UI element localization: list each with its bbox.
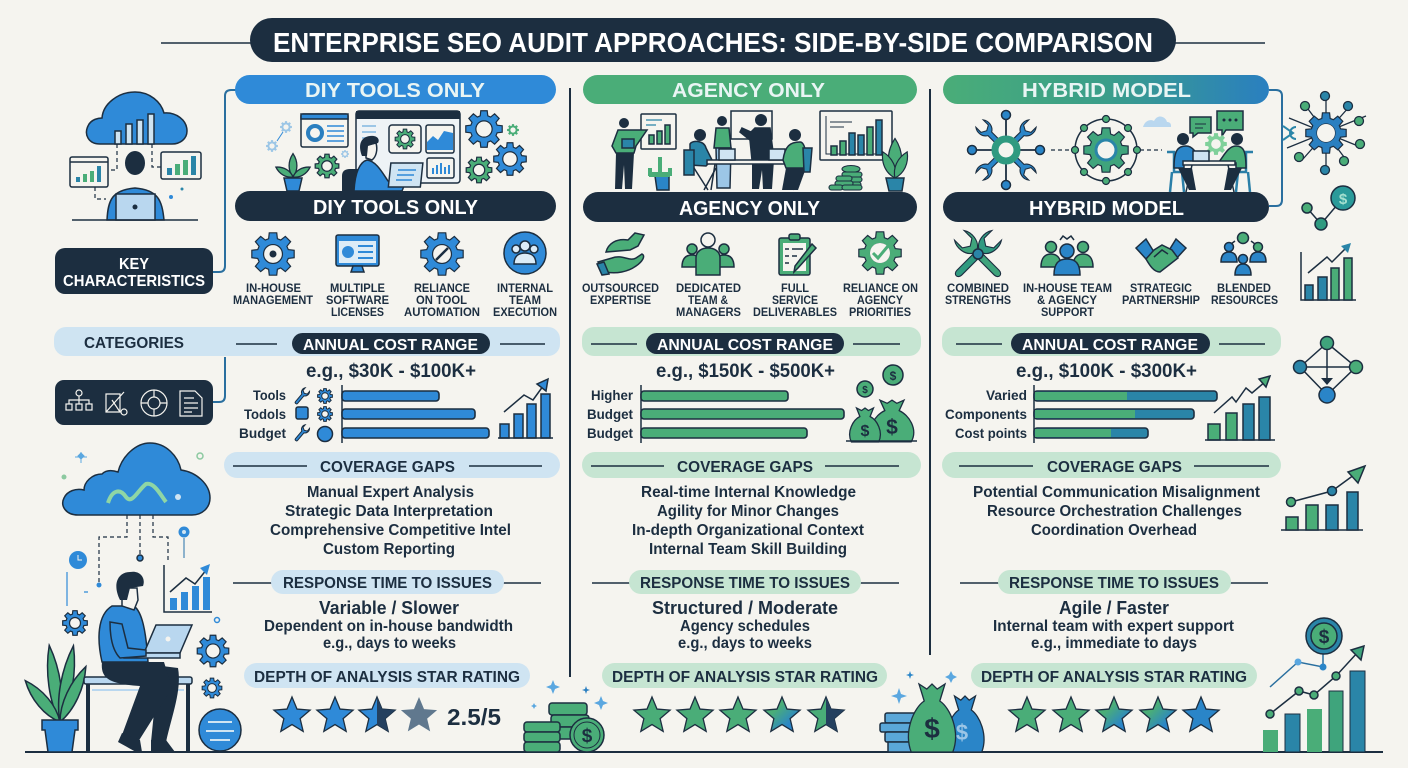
text: hybrid cost range: e.g., $100K - $300K+: [1016, 361, 1197, 382]
text: DIY characteristic labels: AUTOMATION: [404, 305, 480, 319]
chart: bottom right growth with coin: $: [1319, 627, 1330, 648]
text: agency response detail: [652, 598, 838, 652]
text: hybrid characteristic labels: PARTNERSHIP: [1122, 293, 1200, 307]
heading: DIY tools only subheader: DIY TOOLS ONLY: [313, 196, 478, 219]
heading: DIY depth of analysis: DEPTH OF ANALYSIS STAR RATING: [254, 669, 520, 686]
icon: reliance on agency priorities gear: [859, 232, 901, 274]
chart: hybrid coverage trend: [1281, 466, 1365, 530]
connector: hybrid headers to network gear: [1269, 90, 1296, 206]
heading: hybrid response time: [960, 570, 1268, 594]
text: DIY coverage gaps list: Strategic Data Interpretation: [285, 503, 493, 520]
text: hybrid response detail: [993, 598, 1234, 652]
illustration: books and money bags: $: [956, 720, 968, 745]
text: agency characteristic labels: DELIVERABLES: [753, 305, 837, 319]
heading: DIY coverage gaps: COVERAGE GAPS: [320, 459, 455, 476]
heading: agency coverage gaps: [582, 452, 921, 478]
text: hybrid characteristic labels: [945, 281, 1278, 319]
text: agency characteristic labels: PRIORITIES: [849, 305, 911, 319]
heading: DIY response time: [233, 570, 541, 594]
chart: DIY cost bars: [239, 385, 489, 443]
icon: strategic partnership handshake: [1136, 239, 1186, 272]
chart: hybrid cost bars: Components: [945, 406, 1027, 422]
heading: agency annual cost range: [582, 327, 921, 356]
icon: full service deliverables clipboard: [779, 234, 816, 275]
heading: hybrid annual cost range: [942, 327, 1281, 356]
text: agency characteristic labels: TEAM &: [688, 293, 728, 307]
text: hybrid characteristic labels: IN-HOUSE TEAM: [1023, 281, 1112, 295]
icon: outsourced expertise hand: [597, 233, 644, 275]
text: DIY cost range: e.g., $30K - $100K+: [306, 361, 476, 382]
icon: combined strengths wrenches: [950, 229, 1006, 282]
heading: hybrid annual cost range: ANNUAL COST RANGE: [1022, 337, 1198, 354]
text: agency coverage gaps list: Internal Team Skill Building: [649, 541, 847, 558]
icon: agency money bags: [846, 365, 917, 442]
heading: DIY tools only subheader: [235, 191, 556, 221]
panel: categories band: ANNUAL COST RANGE: [303, 337, 478, 354]
text: agency coverage gaps list: [632, 484, 864, 558]
heading: hybrid model subheader: HYBRID MODEL: [1029, 197, 1184, 220]
text: DIY coverage gaps list: Manual Expert Analysis: [307, 484, 474, 501]
text: DIY characteristic labels: TEAM: [509, 293, 541, 307]
text: DIY characteristic labels: EXECUTION: [493, 305, 557, 319]
text: DIY characteristic labels: RELIANCE: [414, 281, 470, 295]
text: DIY characteristic labels: MULTIPLE: [330, 281, 385, 295]
chart: bottom right growth with coin: [1263, 618, 1365, 752]
chart: DIY cost bars: Tools: [253, 387, 286, 403]
rating: hybrid stars: [1009, 697, 1219, 731]
icon: in-house team and agency support: [1041, 236, 1093, 275]
ground line: [25, 751, 1383, 753]
text: agency characteristic labels: EXPERTISE: [590, 293, 651, 307]
title banner: [161, 18, 1265, 62]
text: hybrid characteristic labels: STRENGTHS: [945, 293, 1011, 307]
text: agency cost range: e.g., $150K - $500K+: [656, 361, 835, 382]
heading: hybrid model header: [943, 75, 1269, 104]
text: hybrid characteristic labels: & AGENCY: [1037, 293, 1097, 307]
heading: DIY coverage gaps: [224, 452, 560, 478]
text: DIY response detail: Dependent on in-house bandwidth: [264, 618, 513, 635]
title banner: ENTERPRISE SEO AUDIT APPROACHES: SIDE-BY-SIDE COMPARISON: [273, 27, 1153, 58]
illustration: analyst under cloud with charts: [70, 92, 201, 220]
panel: agency only: [582, 75, 918, 319]
chart: hybrid growth icon: [1205, 376, 1275, 440]
chart: hybrid cost bars: Varied: [986, 387, 1027, 403]
text: agency characteristic labels: FULL: [781, 281, 809, 295]
text: DIY response detail: Variable / Slower: [319, 598, 459, 618]
rating: DIY stars 2.5 of 5: [274, 697, 501, 731]
heading: hybrid depth of analysis: DEPTH OF ANALYSIS STAR RATING: [981, 669, 1247, 686]
icon: multiple software licenses monitor: [336, 235, 379, 272]
icon: dollar node: $: [1339, 191, 1348, 208]
column dividers: [570, 88, 930, 677]
heading: hybrid coverage gaps: COVERAGE GAPS: [1047, 459, 1182, 476]
heading: DIY response time: RESPONSE TIME TO ISSUES: [283, 575, 492, 592]
text: DIY coverage gaps list: Comprehensive Competitive Intel: [270, 522, 511, 539]
text: agency characteristic labels: MANAGERS: [676, 305, 741, 319]
chart: side growth chart: [1301, 243, 1356, 300]
text: DIY coverage gaps list: [270, 484, 511, 558]
heading: agency response time: RESPONSE TIME TO ISSUES: [640, 575, 850, 592]
panel: categories band: CATEGORIES: [84, 335, 184, 352]
text: DIY response detail: [264, 598, 513, 652]
text: hybrid response detail: Agile / Faster: [1059, 598, 1169, 618]
icon: dedicated team managers: [682, 233, 734, 275]
text: hybrid coverage gaps list: Potential Communication Misalignment: [973, 484, 1260, 501]
text: DIY characteristic labels: LICENSES: [331, 305, 384, 319]
icon: dollar node: [1302, 186, 1355, 230]
illustration: agency team meeting: [612, 111, 912, 191]
icon: agency money bags: $: [861, 423, 870, 440]
illustration: books and money bags: [880, 671, 984, 752]
text: agency characteristic labels: RELIANCE ON: [843, 281, 918, 295]
text: DIY characteristic labels: ON TOOL: [416, 293, 467, 307]
illustration: books and money bags: $: [924, 713, 940, 744]
text: DIY characteristic labels: [233, 281, 557, 319]
chart: agency cost bars: Higher: [591, 387, 634, 403]
heading: DIY tools only header: DIY TOOLS ONLY: [305, 79, 485, 102]
chart: agency cost bars: Budget: [587, 425, 633, 441]
text: DIY characteristic labels: INTERNAL: [497, 281, 553, 295]
chart: agency cost bars: [587, 385, 844, 443]
illustration: person with laptop under cloud: [21, 443, 241, 752]
text: hybrid response detail: Internal team with expert support: [993, 618, 1234, 635]
icon: network gear: [1287, 92, 1366, 174]
text: agency characteristic labels: OUTSOURCED: [582, 281, 659, 295]
heading: DIY depth of analysis: [244, 663, 530, 688]
illustration: person at dashboard with gears: [266, 111, 526, 191]
chart: DIY growth icon: [498, 379, 553, 438]
chart: DIY cost bars: Budget: [239, 425, 286, 441]
icon: in-house management gear: [252, 233, 294, 275]
text: DIY characteristic labels: SOFTWARE: [326, 293, 389, 307]
heading: hybrid model subheader: [943, 192, 1269, 222]
text: DIY characteristic labels: MANAGEMENT: [233, 293, 314, 307]
heading: agency only header: [583, 75, 917, 104]
heading: agency annual cost range: ANNUAL COST RANGE: [657, 337, 833, 354]
heading: agency only subheader: [583, 192, 917, 222]
panel: key characteristics label: CHARACTERISTICS: [63, 273, 205, 290]
text: agency response detail: Agency schedules: [680, 618, 810, 635]
text: agency response detail: e.g., days to weeks: [678, 635, 812, 652]
illustration: tools, gear and partnership: [968, 110, 1253, 192]
text: hybrid coverage gaps list: [973, 484, 1260, 539]
text: hybrid characteristic labels: COMBINED: [947, 281, 1009, 295]
heading: hybrid model header: HYBRID MODEL: [1022, 79, 1191, 102]
chart: agency cost bars: Budget: [587, 406, 633, 422]
text: agency coverage gaps list: Real-time Internal Knowledge: [641, 484, 856, 501]
chart: hybrid cost bars: Cost points: [955, 425, 1027, 441]
icon: diamond network: [1294, 336, 1362, 403]
text: hybrid characteristic labels: STRATEGIC: [1130, 281, 1192, 295]
heading: agency only header: AGENCY ONLY: [672, 79, 825, 102]
heading: agency depth of analysis: DEPTH OF ANALYSIS STAR RATING: [612, 669, 878, 686]
panel: category icons: [55, 357, 225, 425]
heading: agency depth of analysis: [602, 663, 887, 688]
heading: hybrid depth of analysis: [971, 663, 1257, 688]
text: agency coverage gaps list: In-depth Organizational Context: [632, 522, 864, 539]
text: agency characteristic labels: [582, 281, 918, 319]
text: hybrid characteristic labels: RESOURCES: [1211, 293, 1278, 307]
panel: DIY tools only: [233, 75, 557, 319]
panel: categories band: [54, 327, 560, 356]
text: hybrid characteristic labels: SUPPORT: [1041, 305, 1095, 319]
illustration: coin stack: [524, 680, 608, 752]
chart: DIY cost bars: Todols: [244, 406, 286, 422]
text: agency response detail: Structured / Moderate: [652, 598, 838, 618]
panel: key characteristics label: KEY: [119, 256, 150, 273]
heading: hybrid response time: RESPONSE TIME TO ISSUES: [1009, 575, 1219, 592]
text: agency characteristic labels: SERVICE: [772, 293, 818, 307]
text: DIY response detail: e.g., days to weeks: [323, 635, 456, 652]
icon: agency money bags: $: [886, 416, 898, 439]
text: agency characteristic labels: DEDICATED: [676, 281, 741, 295]
text: hybrid response detail: e.g., immediate to days: [1031, 635, 1197, 652]
text: hybrid coverage gaps list: Resource Orchestration Challenges: [987, 503, 1242, 520]
rating: agency stars: [634, 697, 844, 731]
chart: hybrid cost bars: [945, 385, 1217, 443]
text: DIY coverage gaps list: Custom Reporting: [323, 541, 455, 558]
text: agency characteristic labels: AGENCY: [857, 293, 903, 307]
text: agency coverage gaps list: Agility for Minor Changes: [657, 503, 839, 520]
panel: key characteristics label: [55, 90, 236, 294]
text: DIY characteristic labels: IN-HOUSE: [246, 281, 301, 295]
text: hybrid coverage gaps list: Coordination Overhead: [1031, 522, 1197, 539]
icon: blended resources: [1221, 232, 1266, 275]
rating: DIY stars 2.5 of 5: 2.5/5: [447, 704, 501, 730]
icon: agency money bags: $: [862, 385, 868, 396]
icon: internal team execution circle: [504, 232, 546, 274]
icon: reliance on tool automation gear: [421, 233, 463, 275]
heading: agency coverage gaps: COVERAGE GAPS: [677, 459, 813, 476]
illustration: coin stack: $: [582, 726, 593, 747]
text: hybrid characteristic labels: BLENDED: [1217, 281, 1271, 295]
heading: DIY tools only header: [235, 75, 556, 104]
icon: agency money bags: $: [890, 369, 897, 383]
heading: hybrid coverage gaps: [942, 452, 1281, 478]
heading: agency response time: [592, 570, 899, 594]
panel: hybrid model: [943, 75, 1278, 319]
heading: agency only subheader: AGENCY ONLY: [679, 197, 820, 220]
